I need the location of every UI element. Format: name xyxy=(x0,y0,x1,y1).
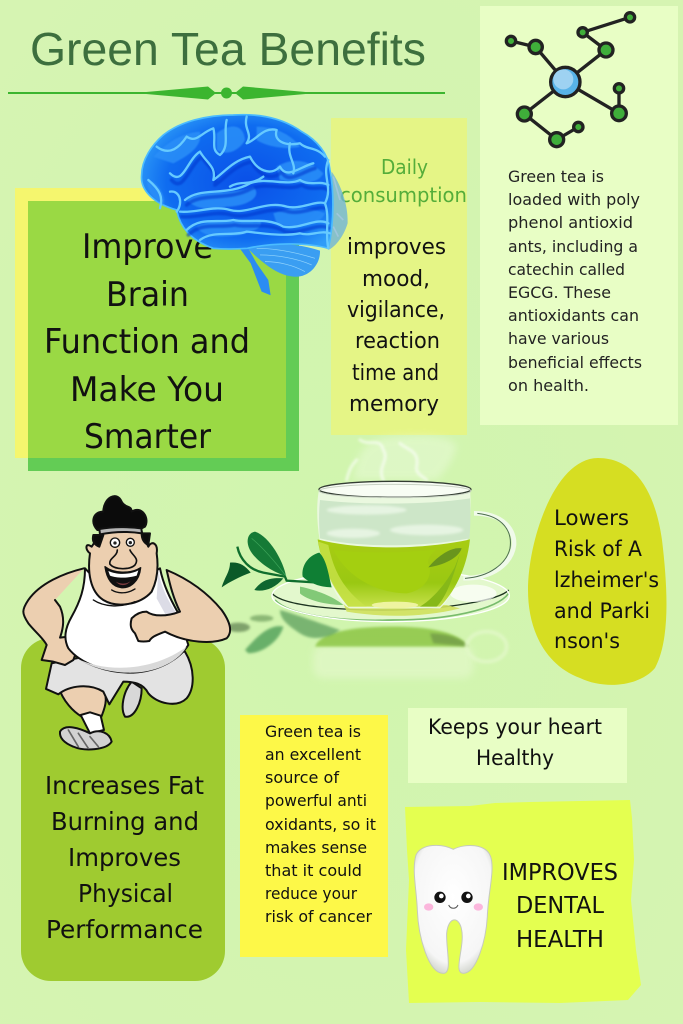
panel: dental health: HEALTH xyxy=(516,925,604,953)
panel: cancer risk: an excellent xyxy=(265,745,361,764)
panel: antioxidants: EGCG. These xyxy=(508,283,611,302)
panel: improve brain function: Make You xyxy=(70,370,224,409)
icon: molecule xyxy=(506,13,635,147)
panel: fat burning: Physical xyxy=(78,879,173,908)
right arm xyxy=(131,570,230,642)
title: Green Tea Benefits xyxy=(30,23,426,75)
hair xyxy=(93,496,150,547)
shorts xyxy=(46,652,193,704)
panel: cancer risk: powerful anti xyxy=(265,791,367,810)
panel: dental health xyxy=(405,800,641,1003)
panel: daily consumption xyxy=(331,118,467,435)
panel: cancer risk: Green tea is xyxy=(265,722,361,741)
panel: cancer risk: makes sense xyxy=(265,838,367,857)
title divider ornament xyxy=(8,86,445,100)
panel: improve brain function: Improve xyxy=(82,227,213,266)
panel: dental health: IMPROVES xyxy=(502,858,618,886)
panel: cancer risk: oxidants, so it xyxy=(265,815,376,834)
panel: cancer risk: risk of cancer xyxy=(265,907,372,926)
handle xyxy=(463,513,514,578)
panel: antioxidants: Green tea is xyxy=(508,167,604,186)
panel: antioxidants: catechin called xyxy=(508,260,625,279)
panel: improve brain function: Function and xyxy=(44,322,250,361)
left arm xyxy=(23,568,84,665)
panel: antioxidants xyxy=(480,6,678,425)
panel: antioxidants: ants, including a xyxy=(508,237,638,256)
panel: alzheimer's and parkinson's: nson's xyxy=(554,629,620,654)
panel: fat burning xyxy=(21,638,225,981)
panel: daily consumption: reaction xyxy=(355,329,440,354)
illustration: jogging man xyxy=(23,496,230,749)
panel: cancer risk: source of xyxy=(265,768,340,787)
lighter gyri xyxy=(147,126,325,237)
saucer xyxy=(272,570,509,622)
panel: antioxidants: phenol antioxid xyxy=(508,213,633,232)
panel: heart health: Keeps your heart xyxy=(428,715,602,740)
panel: heart health: Healthy xyxy=(476,746,554,771)
illustration: green tea cup xyxy=(222,435,514,678)
panel: daily consumption: Daily xyxy=(381,155,428,179)
panel: fat burning: Burning and xyxy=(51,807,199,836)
panel: daily consumption: improves xyxy=(347,235,446,260)
panel: improve brain function xyxy=(15,188,299,471)
panel: alzheimer's and parkinson's: and Parki xyxy=(554,599,650,624)
panel: daily consumption: time and xyxy=(352,361,439,386)
panel: daily consumption: memory xyxy=(349,392,439,417)
table reflection xyxy=(227,610,507,678)
head xyxy=(86,532,158,605)
panel: daily consumption: mood, xyxy=(362,267,430,292)
panel: improve brain function: Smarter xyxy=(84,417,211,456)
vest xyxy=(65,568,188,673)
panel: fat burning: Increases Fat xyxy=(45,771,204,800)
nose xyxy=(110,550,137,569)
front shoe xyxy=(60,727,112,749)
back shoe xyxy=(123,682,142,717)
panel: dental health: DENTAL xyxy=(516,891,604,919)
condensation xyxy=(319,498,470,545)
panel: alzheimer's and parkinson's: lzheimer's xyxy=(554,568,659,593)
panel: cancer risk: reduce your xyxy=(265,884,357,903)
panel: alzheimer's and parkinson's: Lowers xyxy=(554,506,629,531)
panel: cancer risk xyxy=(240,715,388,957)
panel: antioxidants: beneficial effects xyxy=(508,353,642,372)
panel: antioxidants: have various xyxy=(508,329,609,348)
icon: blue brain xyxy=(142,115,348,295)
panel: daily consumption: consumption xyxy=(340,183,467,207)
cup rim xyxy=(319,481,471,498)
panel: alzheimer's and parkinson's: Risk of A xyxy=(554,537,642,562)
fold shadows and highlights xyxy=(148,117,330,248)
sock xyxy=(81,712,104,733)
panel: fat burning: Improves xyxy=(68,843,181,872)
mouth xyxy=(105,567,141,588)
panel: cancer risk: that it could xyxy=(265,861,362,880)
front leg xyxy=(58,683,106,720)
panel: alzheimer's and parkinson's xyxy=(528,458,666,685)
icon: smiling tooth xyxy=(414,845,492,973)
glass body xyxy=(317,490,471,608)
tea liquid xyxy=(318,539,470,607)
mint sprig xyxy=(222,532,332,591)
panel: daily consumption: vigilance, xyxy=(347,298,445,323)
panel: antioxidants: loaded with poly xyxy=(508,190,640,209)
panel: improve brain function: Brain xyxy=(106,275,189,314)
panel: heart health xyxy=(408,708,627,783)
panel: antioxidants: antioxidants can xyxy=(508,306,639,325)
steam xyxy=(347,435,457,480)
eyes xyxy=(110,538,134,547)
panel: fat burning: Performance xyxy=(46,915,203,944)
panel: antioxidants: on health. xyxy=(508,376,589,395)
headband xyxy=(99,527,142,534)
